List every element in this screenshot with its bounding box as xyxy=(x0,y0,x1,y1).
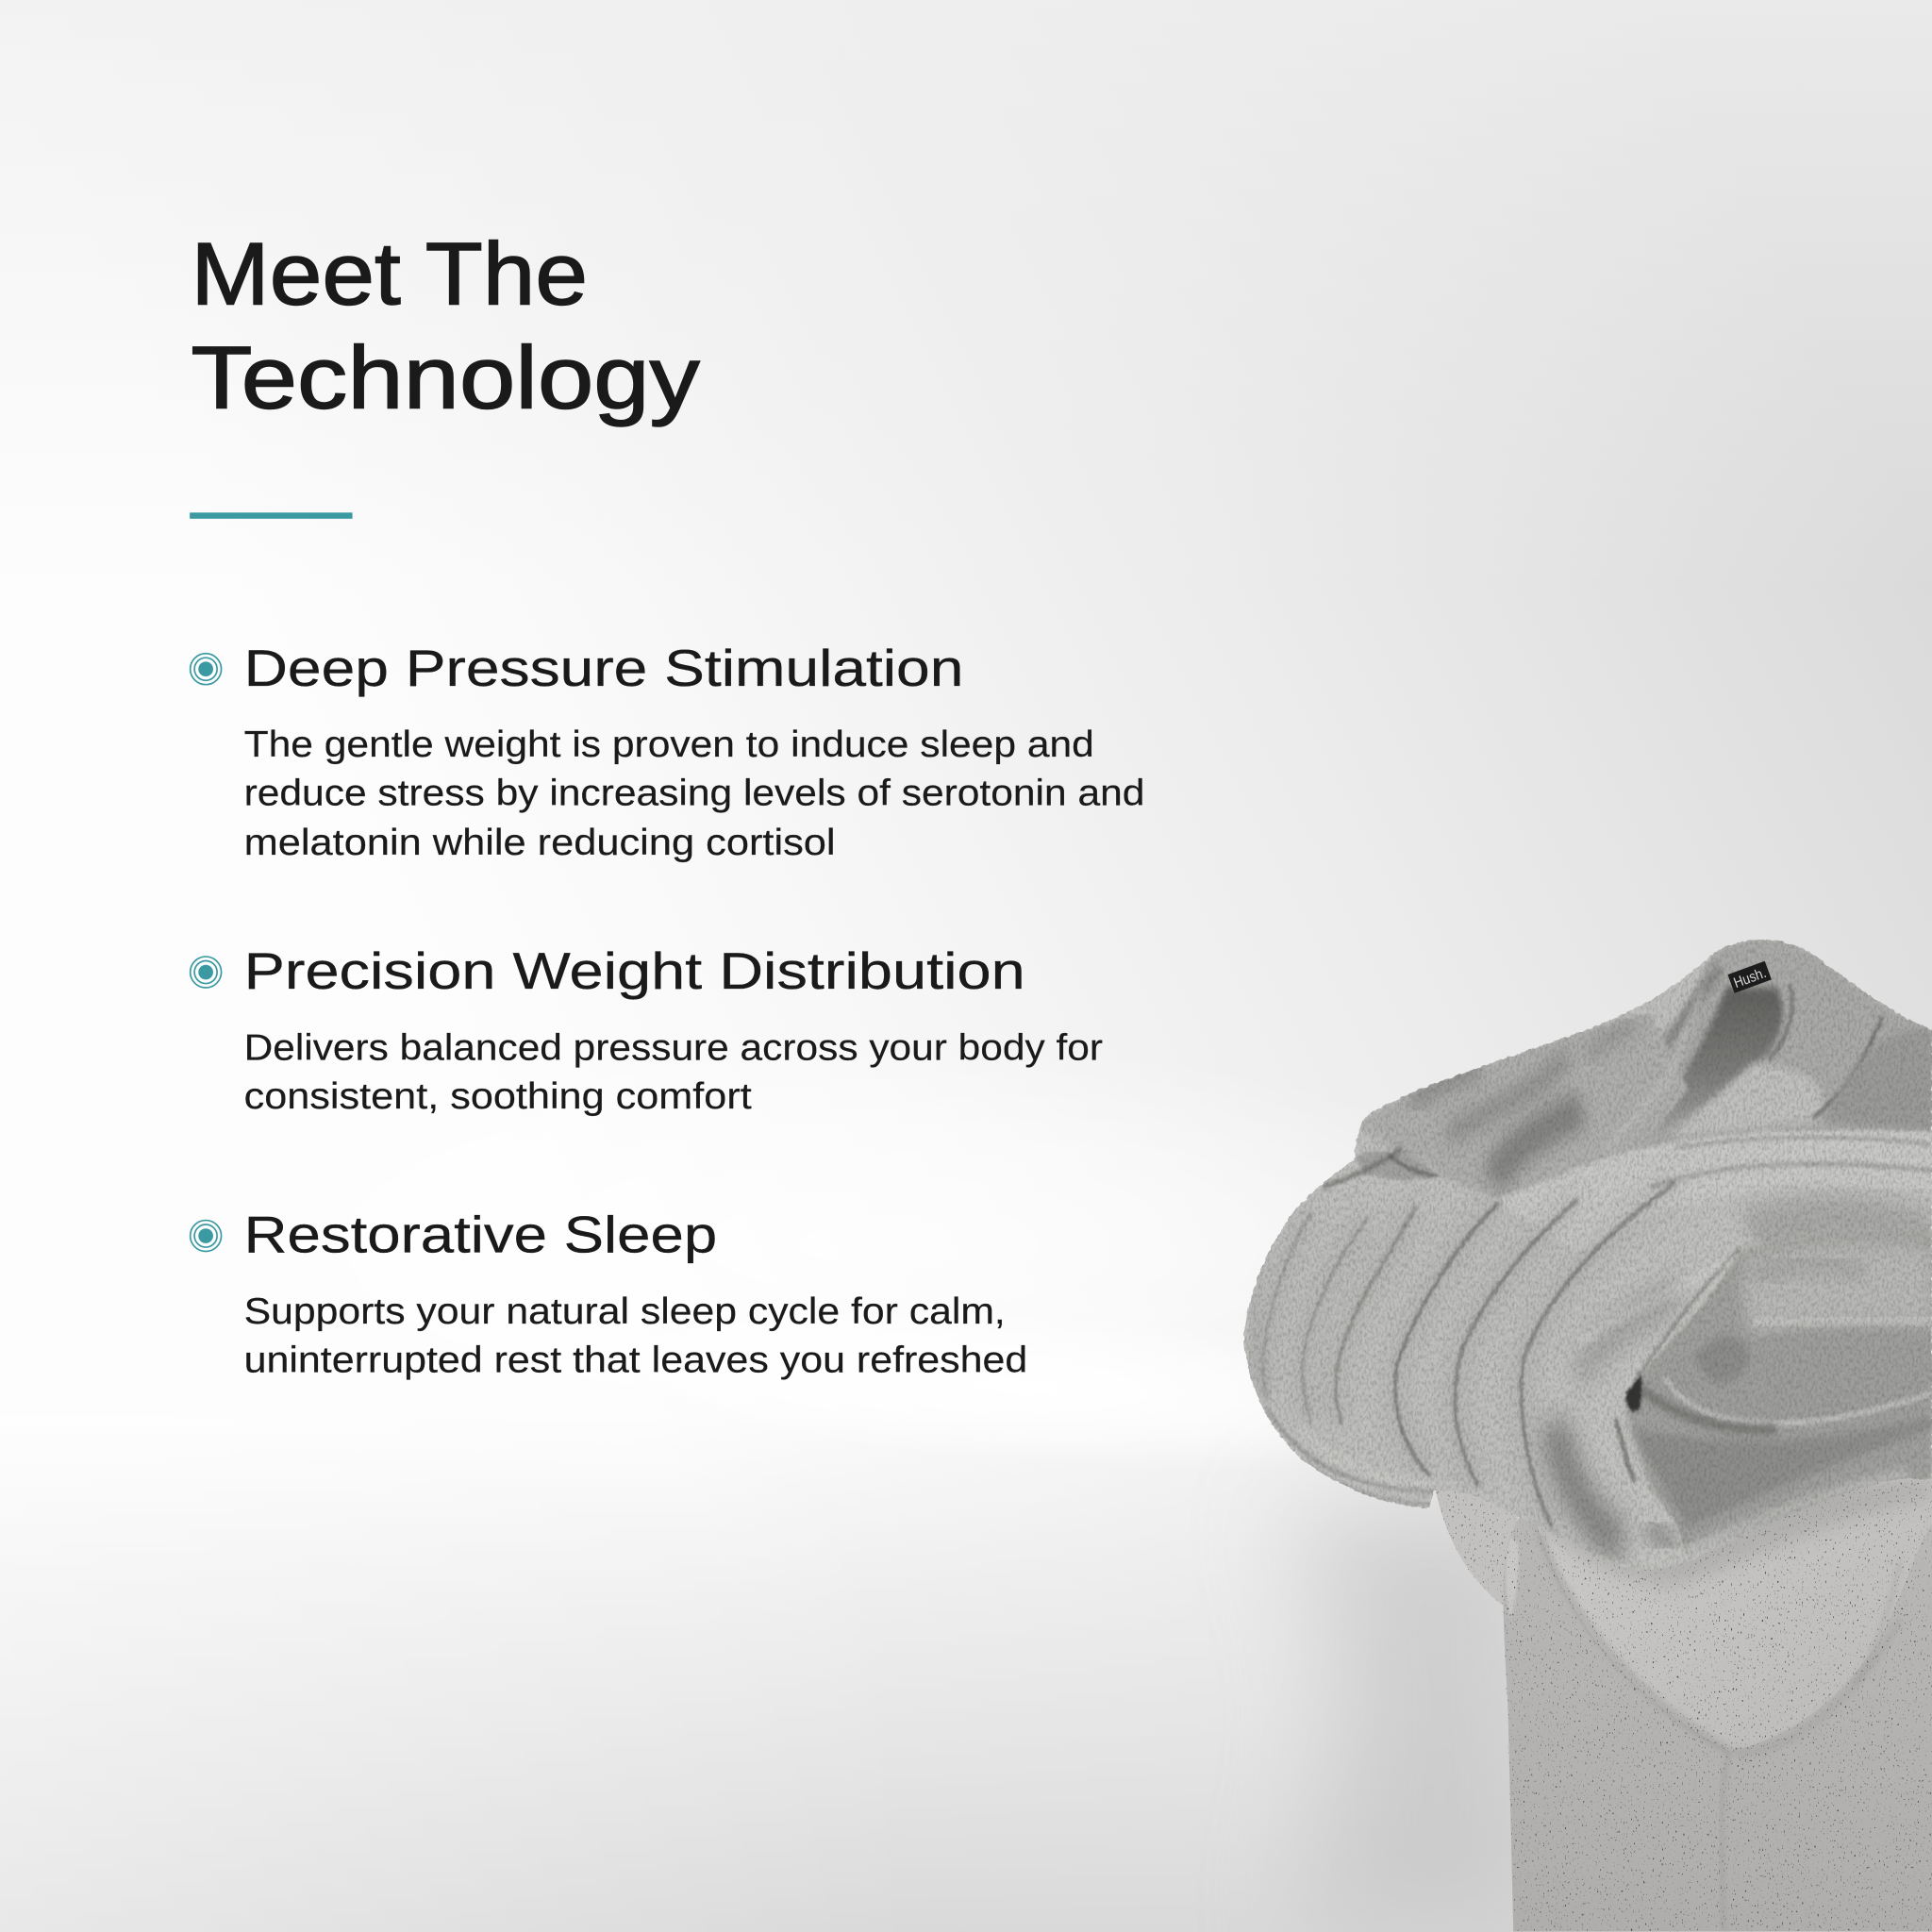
description xyxy=(244,1291,1027,1380)
item: Restorative Sleep xyxy=(191,1206,1027,1380)
main roll top band xyxy=(1502,1128,1932,1203)
blanket ribs xyxy=(1263,1184,1674,1527)
item: Deep Pressure Stimulation xyxy=(191,639,1144,863)
heading: Restorative Sleep xyxy=(244,1206,717,1264)
heading: Deep Pressure Stimulation xyxy=(244,639,963,697)
description: Supports your natural sleep cycle for calm, xyxy=(244,1291,1006,1332)
description: uninterrupted rest that leaves you refreshed xyxy=(244,1340,1027,1380)
neck and back fold xyxy=(1640,940,1932,1149)
description: The gentle weight is proven to induce sleep and xyxy=(244,724,1094,765)
description xyxy=(244,724,1144,863)
blanket body xyxy=(1235,932,1932,1586)
title xyxy=(191,225,700,426)
title: Meet The xyxy=(191,225,588,324)
accent rule xyxy=(190,512,353,519)
small left corner fold xyxy=(1356,1148,1438,1180)
concrete stool xyxy=(1429,1474,1932,1932)
fur texture xyxy=(1235,932,1932,1586)
icon: target bullet xyxy=(191,1221,222,1251)
description: consistent, soothing comfort xyxy=(244,1076,752,1117)
icon: target bullet xyxy=(191,654,222,685)
description: Delivers balanced pressure across your body for xyxy=(244,1027,1103,1068)
description xyxy=(244,1027,1103,1117)
interior layers of roll xyxy=(1625,1233,1932,1550)
soft underside of left roll xyxy=(1389,1484,1433,1491)
roll lip xyxy=(1623,1260,1732,1551)
stool cast shadow xyxy=(1281,1497,1553,1932)
description: melatonin while reducing cortisol xyxy=(244,823,836,863)
rib valley shading xyxy=(1334,1189,1664,1276)
title: Technology xyxy=(191,327,700,426)
upper fold flap xyxy=(1361,1013,1688,1198)
heading: Precision Weight Distribution xyxy=(244,941,1025,1000)
description: reduce stress by increasing levels of serotonin and xyxy=(244,774,1144,814)
photo: weighted blanket on concrete stool xyxy=(1235,932,1932,1932)
item: Precision Weight Distribution xyxy=(191,941,1103,1117)
icon: target bullet xyxy=(191,957,222,988)
brand tag: Hush. xyxy=(1732,965,1769,991)
